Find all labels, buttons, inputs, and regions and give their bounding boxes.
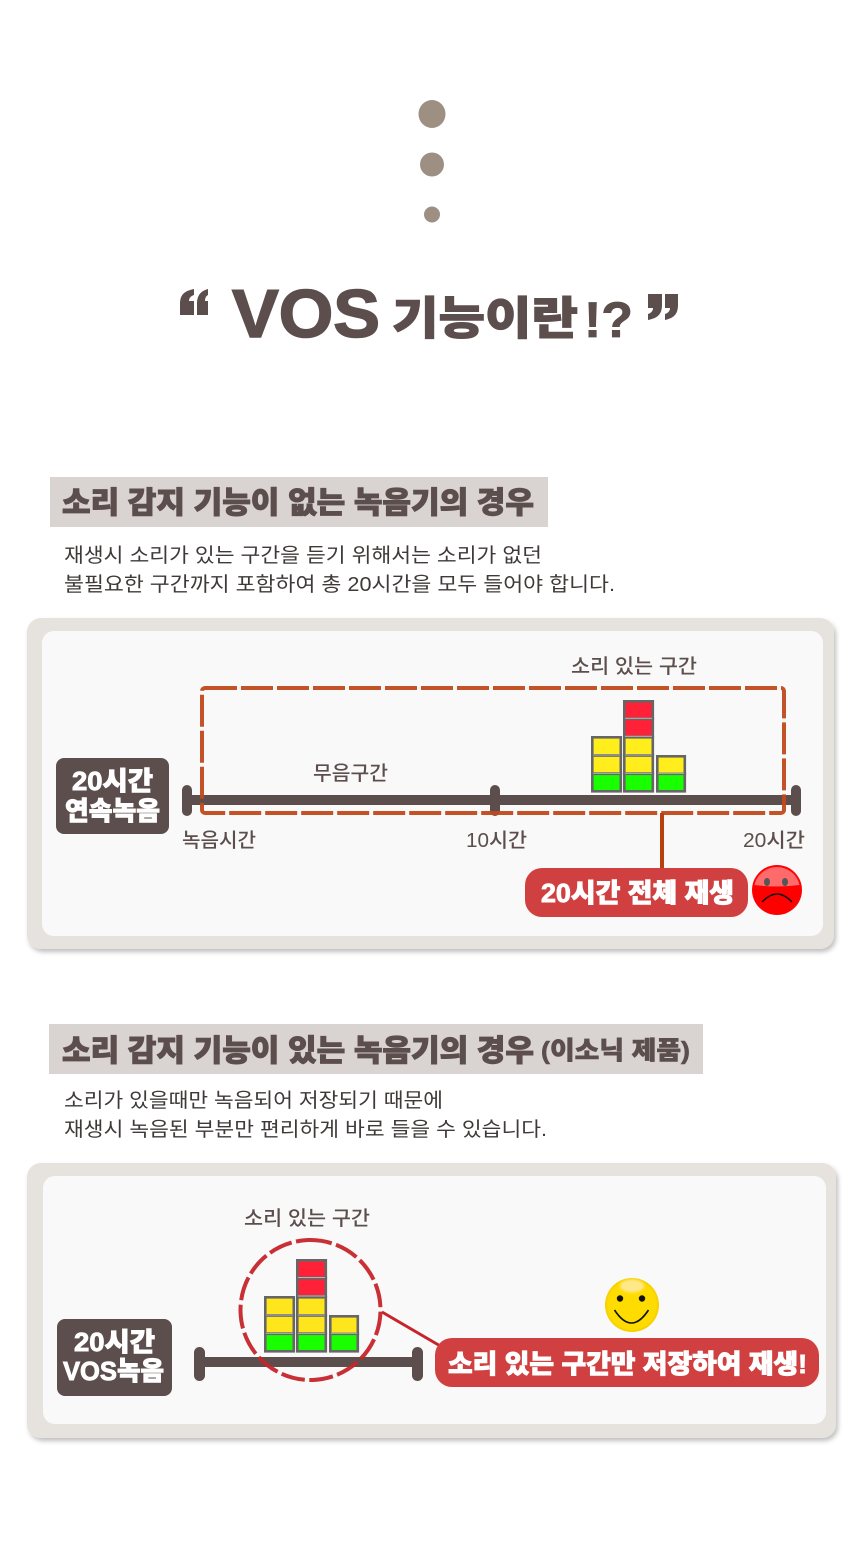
section 2 heading: 소리 감지 기능이 있는 녹음기의 경우 xyxy=(62,1035,534,1068)
panel: recorder with sound detection xyxy=(27,1163,836,1438)
callout: save and play only sound sections: 소리 있는 구간만 저장하여 재생! xyxy=(448,1349,807,1379)
section 2 heading xyxy=(49,1024,703,1074)
label: 10 hours: 10시간 xyxy=(466,829,527,852)
label: 20 hour continuous recording: 연속녹음 xyxy=(65,796,160,826)
timeline xyxy=(194,1347,423,1381)
closing quote xyxy=(648,294,678,320)
panel: recorder without sound detection xyxy=(27,618,834,949)
section 2 description xyxy=(64,1089,547,1141)
label: sound section: 소리 있는 구간 xyxy=(571,655,697,678)
icon: sad face xyxy=(752,865,802,915)
section 1 heading xyxy=(50,477,548,527)
label: sound section: 소리 있는 구간 xyxy=(244,1207,370,1230)
level meter bars xyxy=(265,1260,358,1351)
opening quote xyxy=(180,289,208,315)
label: 20 hour VOS recording: VOS녹음 xyxy=(63,1356,164,1386)
connector line xyxy=(382,1312,442,1347)
connector line xyxy=(660,813,664,869)
callout: save and play only sound sections xyxy=(435,1338,819,1387)
label: recording time: 녹음시간 xyxy=(182,829,256,852)
section 1 description: 재생시 소리가 있는 구간을 듣기 위해서는 소리가 없던 xyxy=(64,544,542,567)
label: 20 hour continuous recording: 20시간 xyxy=(72,766,153,796)
level meter bars xyxy=(592,701,685,791)
title xyxy=(180,276,678,352)
label: 20 hour VOS recording xyxy=(57,1319,172,1396)
title VOS: VOS xyxy=(232,276,380,352)
section 1 description: 불필요한 구간까지 포함하여 총 20시간을 모두 들어야 합니다. xyxy=(64,573,615,596)
dashed box: sound section xyxy=(202,688,784,813)
callout: play entire 20 hours: 20시간 전체 재생 xyxy=(541,878,734,908)
label: silent section: 무음구간 xyxy=(313,762,388,785)
section 2 description: 소리가 있을때만 녹음되어 저장되기 때문에 xyxy=(64,1089,443,1112)
timeline xyxy=(182,785,801,816)
section 1 description xyxy=(64,544,615,596)
decorative dots xyxy=(418,100,446,222)
label: 20 hour VOS recording: 20시간 xyxy=(74,1327,155,1357)
label: 20 hour continuous recording xyxy=(56,758,169,834)
callout: play entire 20 hours xyxy=(525,868,748,917)
title punctuation: !? xyxy=(584,292,633,348)
section 2 description: 재생시 녹음된 부분만 편리하게 바로 들을 수 있습니다. xyxy=(64,1118,547,1141)
icon: smiley face xyxy=(605,1278,659,1332)
label: 20 hours: 20시간 xyxy=(743,829,805,852)
section 1 heading: 소리 감지 기능이 없는 녹음기의 경우 xyxy=(62,487,534,520)
section 2 heading: (이소닉 제품) xyxy=(541,1037,690,1065)
dashed circle: sound section xyxy=(238,1238,383,1382)
title korean: 기능이란 xyxy=(392,293,578,344)
